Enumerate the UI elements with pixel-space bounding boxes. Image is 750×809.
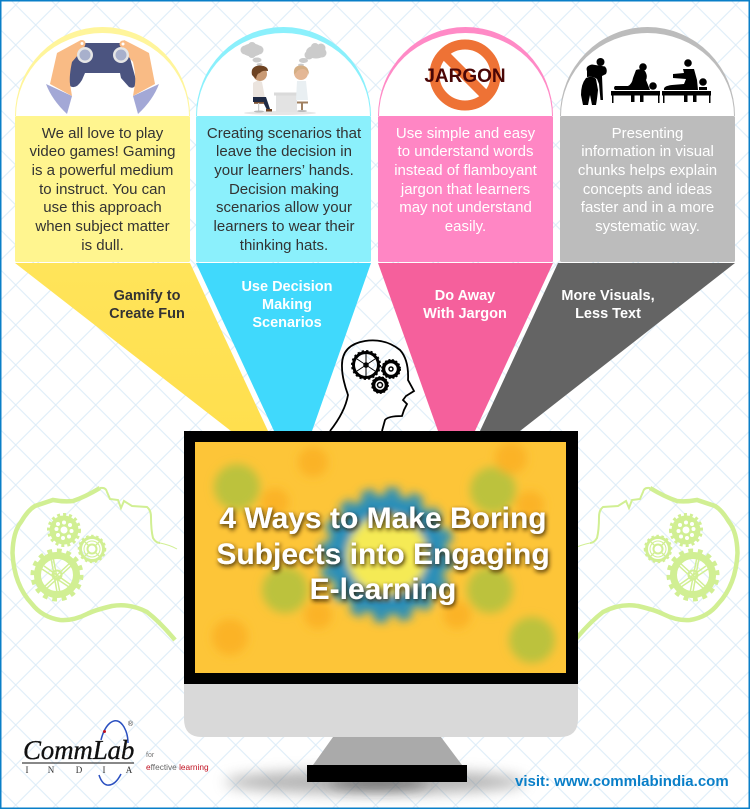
label: use decision making scenarios (241, 279, 333, 331)
illustration: left head with gears (12, 488, 177, 640)
dome: gamify (15, 27, 190, 116)
label: more visuals less text: More Visuals, (561, 288, 655, 304)
logo: CommLab India: effective learning (146, 762, 209, 772)
text box: decision scenarios (196, 116, 371, 262)
icon: game controller in hands (46, 40, 159, 114)
text box: decision scenarios: Creating scenarios that (207, 125, 362, 142)
text box: gamify: video games! Gaming (30, 143, 175, 160)
dome: decision scenarios (196, 27, 371, 116)
text box: decision scenarios: scenarios allow your (216, 199, 352, 216)
label: use decision making scenarios: Making (262, 297, 312, 313)
monitor stand (313, 737, 462, 765)
logo: CommLab India (22, 720, 209, 785)
text box: decision scenarios: thinking hats. (240, 237, 328, 254)
text box: visuals: faster and in a more (581, 199, 714, 216)
text box: jargon: easily. (445, 218, 486, 235)
title: 4 Ways to Make Boring (219, 502, 547, 535)
icon: no jargon sign (424, 44, 506, 106)
screen with blurred gears (195, 442, 566, 673)
icon: head with gears (330, 340, 414, 431)
logo: CommLab India: N (48, 765, 55, 775)
text box: jargon: jargon that learners (400, 181, 530, 198)
illustration: right head with gears (573, 488, 738, 640)
logo: CommLab India: I (102, 765, 106, 775)
text box: visuals: Presenting (612, 125, 683, 142)
label: gamify to create fun: Gamify to (114, 288, 181, 304)
label: use decision making scenarios: Use Decision (241, 279, 333, 295)
text box: visuals: chunks helps explain (578, 162, 717, 179)
monitor shadow (225, 770, 525, 794)
title: E-learning (310, 573, 456, 606)
funnel: jargon (378, 263, 553, 431)
text box: gamify: is a powerful medium (32, 162, 173, 179)
funnel: decision scenarios (196, 263, 371, 431)
logo: CommLab India: A (126, 765, 133, 775)
monitor base (307, 765, 467, 782)
text box: decision scenarios: Decision making (229, 181, 339, 198)
text box: gamify: when subject matter (34, 218, 170, 235)
logo: CommLab India: D (76, 765, 83, 775)
text box: jargon: instead of flamboyant (394, 162, 538, 179)
label: do away with jargon: Do Away (435, 288, 495, 304)
title (216, 502, 550, 606)
label: use decision making scenarios: Scenarios (252, 315, 322, 331)
text box: gamify: to instruct. You can (39, 181, 166, 198)
text box: decision scenarios: your learners’ hands. (214, 162, 354, 179)
panel: visuals (480, 27, 735, 431)
logo: CommLab India: CommLab (23, 735, 134, 765)
label: gamify to create fun: Create Fun (109, 306, 185, 322)
text box: jargon (378, 116, 553, 262)
text box: gamify: use this approach (43, 199, 162, 216)
logo: CommLab India: I (26, 765, 28, 775)
text box: decision scenarios: leave the decision in (216, 143, 352, 160)
text box: visuals: systematic way. (595, 218, 700, 235)
icon: no jargon sign: JARGON (424, 66, 506, 87)
label: do away with jargon: With Jargon (423, 306, 507, 322)
text box: jargon: Use simple and easy (396, 125, 536, 142)
title: Subjects into Engaging (216, 538, 550, 571)
logo: CommLab India: ® (128, 720, 134, 728)
dome: jargon (378, 27, 553, 116)
monitor (184, 431, 578, 782)
label: do away with jargon (423, 288, 507, 322)
text box: gamify: We all love to play (42, 125, 164, 142)
funnel: visuals (480, 263, 735, 431)
monitor chin (184, 680, 578, 737)
icon: people pictograms (581, 58, 711, 105)
text box: gamify: is dull. (81, 237, 124, 254)
text box: jargon: to understand words (398, 143, 533, 160)
panel: decision scenarios (196, 27, 371, 431)
text box: visuals: information in visual (581, 143, 714, 160)
text box: visuals: concepts and ideas (583, 181, 712, 198)
text box: decision scenarios: learners to wear their (214, 218, 354, 235)
panel: jargon (378, 27, 553, 431)
panel: gamify (15, 27, 268, 431)
text box: jargon: may not understand (399, 199, 532, 216)
website link: visit: www.commlabindia.com (515, 773, 729, 790)
dome: visuals (560, 27, 735, 116)
logo: CommLab India: for (146, 752, 155, 759)
monitor bezel (184, 431, 578, 684)
label: gamify to create fun (109, 288, 185, 322)
label: more visuals less text: Less Text (575, 306, 641, 322)
funnel: gamify (15, 263, 268, 431)
label: more visuals less text (561, 288, 655, 322)
text box: visuals (560, 116, 735, 262)
icon: two people at a desk with thought clouds (240, 42, 326, 115)
text box: gamify (15, 116, 190, 262)
